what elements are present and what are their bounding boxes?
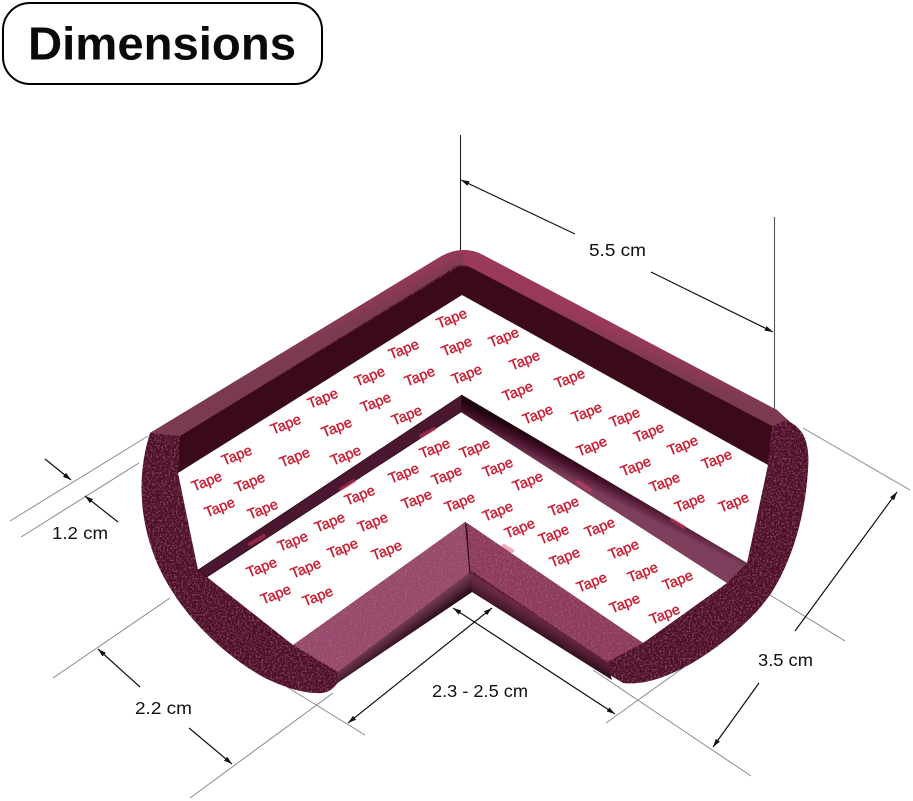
tape labels on the lower panel: Tape — [502, 516, 538, 542]
tape labels on the lower panel: Tape — [244, 555, 280, 581]
tape labels on the upper panel: Tape — [507, 348, 543, 374]
dimension: 3.5 cm: 3.5 cm — [758, 650, 813, 670]
tape labels on the upper panel: Tape — [232, 470, 268, 496]
tape labels on the upper panel: Tape — [607, 405, 643, 431]
dimension: 5.5 cm width: 5.5 cm — [589, 240, 646, 260]
tape labels on the upper panel: Tape — [219, 443, 255, 469]
tape labels on the upper panel: Tape — [631, 420, 667, 446]
tape labels on the lower panel: Tape — [457, 436, 493, 462]
tape labels on the lower panel: Tape — [258, 582, 294, 608]
tape labels on the upper panel: Tape — [449, 362, 485, 388]
tape labels on the lower panel: Tape — [480, 455, 516, 481]
foam silhouette — [141, 250, 808, 693]
tape labels on the upper panel: Tape — [352, 364, 388, 390]
tape labels on the upper panel: Tape — [386, 337, 422, 363]
tape labels on the upper panel: Tape — [520, 402, 556, 428]
tape labels on the lower panel: Tape — [607, 591, 643, 617]
inner dark band — [178, 266, 772, 473]
tape labels on the upper panel — [189, 306, 752, 523]
lower tape panel — [207, 412, 727, 645]
tape labels on the lower panel: Tape — [582, 515, 618, 541]
tape labels on the lower panel: Tape — [510, 469, 546, 495]
tape labels on the upper panel: Tape — [305, 386, 341, 412]
tape labels on the upper panel: Tape — [202, 495, 238, 521]
dimension: 1.2 cm thickness — [10, 436, 148, 543]
apex seam — [466, 522, 470, 574]
tape labels on the upper panel: Tape — [665, 433, 701, 459]
tape labels on the upper panel: Tape — [618, 454, 654, 480]
tape labels on the upper panel: Tape — [268, 412, 304, 438]
tape labels on the lower panel: Tape — [547, 545, 583, 571]
tape labels on the upper panel: Tape — [716, 490, 752, 516]
tape labels on the lower panel: Tape — [300, 584, 336, 610]
tape labels on the lower panel: Tape — [574, 570, 610, 596]
tape labels on the upper panel: Tape — [319, 415, 355, 441]
tape labels on the upper panel: Tape — [699, 447, 735, 473]
dimension: 2.2 cm — [53, 598, 333, 798]
tape labels on the lower panel: Tape — [647, 602, 683, 628]
tape labels on the lower panel: Tape — [369, 538, 405, 564]
tape labels on the upper panel: Tape — [277, 445, 313, 471]
top rim right side — [463, 250, 787, 426]
tape labels on the lower panel: Tape — [325, 536, 361, 562]
tape labels on the upper panel: Tape — [402, 364, 438, 390]
tape labels on the lower panel: Tape — [275, 529, 311, 555]
tape labels on the lower panel — [244, 436, 696, 628]
tape labels on the lower panel: Tape — [342, 483, 378, 509]
tape labels on the lower panel: Tape — [536, 522, 572, 548]
title: Dimensions — [28, 18, 296, 70]
left mauve face — [293, 522, 470, 672]
tape labels on the lower panel: Tape — [355, 510, 391, 536]
right mauve face — [467, 523, 643, 662]
tape labels on the upper panel: Tape — [574, 434, 610, 460]
left lower strip — [336, 572, 472, 684]
dimension: 5.5 cm width — [460, 135, 774, 412]
tape labels on the lower panel: Tape — [429, 463, 465, 489]
tape labels on the upper panel: Tape — [439, 334, 475, 360]
dimension: 3.5 cm — [593, 428, 910, 776]
title — [3, 3, 322, 84]
tape labels on the upper panel: Tape — [189, 469, 225, 495]
tape labels on the lower panel: Tape — [480, 499, 516, 525]
dimension: 2.3 - 2.5 cm: 2.3 - 2.5 cm — [432, 681, 528, 701]
tape labels on the upper panel: Tape — [672, 490, 708, 516]
tape labels on the lower panel: Tape — [546, 494, 582, 520]
upper tape panel — [178, 295, 768, 570]
left inner rail — [198, 395, 462, 577]
tape labels on the lower panel: Tape — [660, 568, 696, 594]
tape labels on the upper panel: Tape — [328, 443, 364, 469]
tape labels on the upper panel: Tape — [569, 400, 605, 426]
tape labels on the lower panel: Tape — [386, 461, 422, 487]
right lower strip — [470, 572, 612, 680]
top rim left side — [150, 250, 463, 436]
tape labels on the upper panel: Tape — [647, 470, 683, 496]
tape labels on the upper panel: Tape — [486, 325, 522, 351]
pink tape smudges — [250, 429, 684, 551]
tape labels on the upper panel: Tape — [245, 497, 281, 523]
dimension: 1.2 cm thickness: 1.2 cm — [52, 523, 108, 543]
tape labels on the upper panel: Tape — [434, 306, 470, 332]
right inner rail — [461, 395, 747, 583]
tape labels on the upper panel: Tape — [552, 366, 588, 392]
tape labels on the lower panel: Tape — [312, 510, 348, 536]
tape labels on the lower panel: Tape — [288, 556, 324, 582]
tape labels on the lower panel: Tape — [625, 560, 661, 586]
tape labels on the upper panel: Tape — [500, 379, 536, 405]
dimension: 2.3 - 2.5 cm — [287, 608, 683, 735]
dimension: 2.2 cm: 2.2 cm — [135, 698, 192, 718]
tape labels on the upper panel: Tape — [358, 390, 394, 416]
tape labels on the upper panel: Tape — [389, 403, 425, 429]
tape labels on the lower panel: Tape — [442, 490, 478, 516]
tape labels on the lower panel: Tape — [606, 537, 642, 563]
tape labels on the lower panel: Tape — [417, 436, 453, 462]
foam corner guard — [141, 250, 808, 693]
tape labels on the lower panel: Tape — [399, 487, 435, 513]
